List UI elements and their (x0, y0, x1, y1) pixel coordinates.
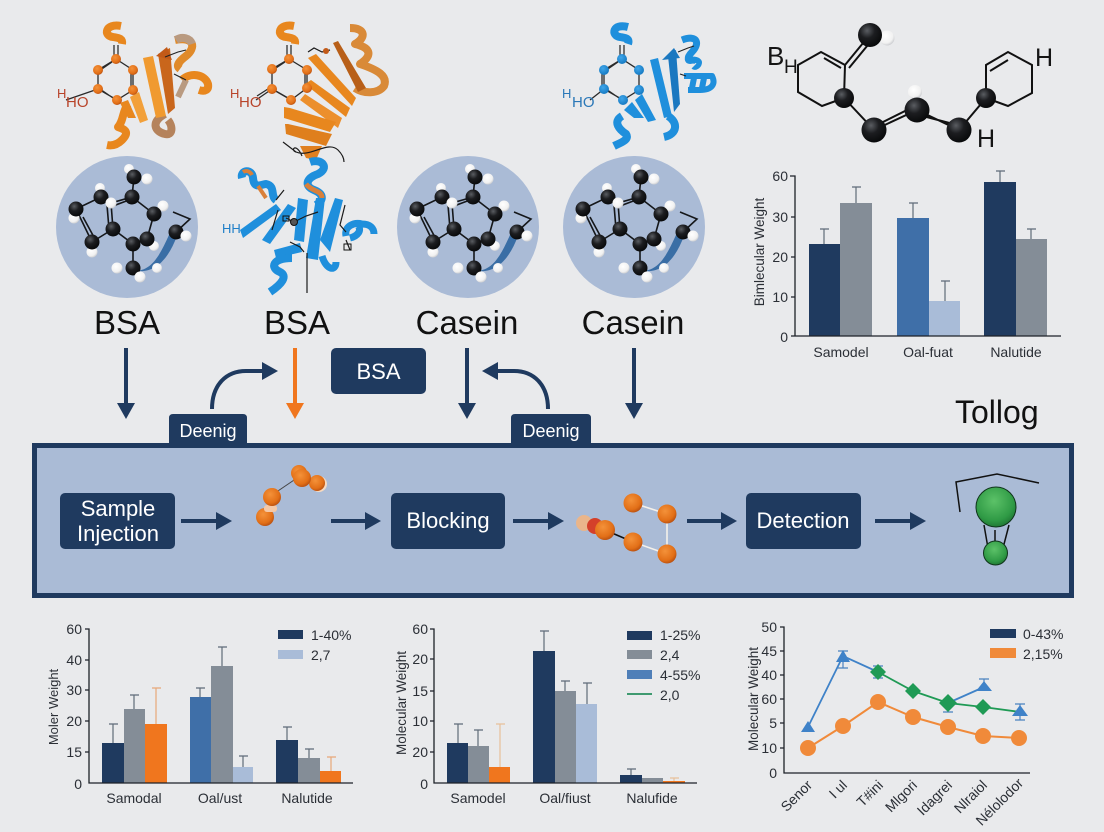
bar chart bottom left: 30 (66, 682, 82, 698)
bar chart top right: Nalutide (990, 344, 1042, 360)
legend: 2,7 (311, 647, 331, 663)
bar chart top right (752, 168, 1061, 360)
box: BSA (331, 348, 426, 394)
bar chart top right: 20 (772, 249, 788, 265)
bar chart bottom centre (394, 621, 700, 806)
bar chart top right: Bimlecular Weight (752, 197, 767, 306)
icon: orange and blue protein ribbon: HO (239, 94, 262, 111)
arrow (875, 512, 926, 530)
arrow: BSA down (117, 348, 135, 419)
arrow (687, 512, 737, 530)
tab: Deenig left: Deenig (179, 421, 237, 441)
arrow (331, 512, 381, 530)
arrow (513, 512, 564, 530)
line chart bottom right: 50 (761, 619, 777, 635)
bar chart bottom centre: Nalufide (626, 790, 678, 806)
icon: orange protein ribbon with ring: H (57, 86, 66, 101)
label: Casein right: Casein (582, 304, 684, 341)
line chart bottom right: Mlgori (882, 777, 920, 815)
bar chart bottom left: Nalutide (281, 790, 333, 806)
line chart bottom right: 60 (761, 691, 777, 707)
line chart bottom right (746, 619, 1063, 829)
icon: orange and blue protein ribbon (222, 26, 385, 293)
icon: skeletal molecule top right: H (977, 125, 995, 153)
line chart bottom right: 5 (769, 715, 777, 731)
bar chart bottom left (46, 621, 353, 806)
bar chart bottom left: 0 (74, 776, 82, 792)
icon: molecule circle 3 (563, 156, 705, 298)
legend (990, 626, 1063, 662)
bar chart bottom left: 20 (66, 713, 82, 729)
icon: molecule circle 1 (56, 156, 198, 298)
legend: 4-55% (660, 667, 700, 683)
bar chart top right: 10 (772, 289, 788, 305)
icon: orange protein ribbon with ring: HO (66, 94, 88, 111)
line chart bottom right: Nélolodor (972, 775, 1026, 829)
icon: skeletal molecule top right (767, 23, 1053, 153)
line chart bottom right: T#ini (853, 777, 886, 810)
legend (278, 627, 351, 663)
bar chart bottom centre: 10 (412, 713, 428, 729)
icon: skeletal molecule top right: H (784, 57, 798, 78)
line chart bottom right: Molecular Weight (746, 647, 761, 751)
step: Detection (746, 493, 861, 549)
step: Blocking: Blocking (406, 508, 490, 533)
icon: orange and blue protein ribbon: H (230, 86, 239, 101)
line chart bottom right: Idagrei (914, 777, 955, 818)
line chart bottom right: I ul (826, 777, 850, 801)
tab: Deenig right: Deenig (522, 421, 580, 441)
line chart bottom right: Senor (777, 777, 815, 815)
bar chart bottom centre: 60 (412, 621, 428, 637)
legend: 1-40% (311, 627, 351, 643)
legend: 1-25% (660, 627, 700, 643)
legend: 2,4 (660, 647, 680, 663)
icon: orange protein ribbon with ring (57, 26, 208, 145)
label: BSA centre: BSA (264, 304, 330, 341)
bar chart bottom centre: 15 (412, 683, 428, 699)
arrow: casein right down (625, 348, 643, 419)
bar chart top right: Samodel (813, 344, 869, 360)
bar chart bottom left: Oal/ust (198, 790, 242, 806)
line chart bottom right: 45 (761, 643, 777, 659)
step: Sample Injection: Sample (81, 496, 155, 521)
icon: green detection spheres (956, 474, 1039, 565)
icon: blue protein ribbon with ring: HO (572, 94, 594, 111)
step: Sample Injection (60, 493, 175, 549)
bar chart bottom centre: 20 (412, 744, 428, 760)
icon: blue protein ribbon with ring: H (562, 86, 571, 101)
label: BSA: BSA (94, 304, 160, 341)
legend (627, 627, 700, 703)
bar chart bottom left: Moler Weight (46, 668, 61, 745)
bar chart bottom centre: Samodel (450, 790, 506, 806)
arrow: curved left (212, 362, 278, 409)
icon: orange chain (576, 494, 676, 564)
bar chart top right: Oal-fuat (903, 344, 953, 360)
icon: orange and blue protein ribbon: HH (222, 221, 241, 236)
box: BSA: BSA (356, 359, 401, 384)
step: Blocking (391, 493, 505, 549)
arrow: casein down (458, 348, 476, 419)
tab: Deenig left (169, 414, 247, 447)
bar chart bottom left: 15 (66, 744, 82, 760)
legend: 0-43% (1023, 626, 1063, 642)
bar chart top right: 0 (780, 329, 788, 345)
legend: 2,0 (660, 687, 680, 703)
icon: orange molecule (256, 465, 327, 526)
line chart bottom right: Nlraiol (951, 777, 990, 816)
bar chart bottom left: 40 (66, 652, 82, 668)
icon: skeletal molecule top right: B (767, 41, 784, 71)
icon: skeletal molecule top right: H (1035, 44, 1053, 72)
arrow: orange down (286, 348, 304, 419)
tab: Deenig right (511, 414, 591, 447)
icon: molecule circle 2 (397, 156, 539, 298)
bar chart bottom centre: Molecular Weight (394, 651, 409, 755)
line chart bottom right: 40 (761, 667, 777, 683)
bar chart bottom centre: Oal/fiust (539, 790, 591, 806)
bar chart bottom left: Samodal (106, 790, 162, 806)
legend: 2,15% (1023, 646, 1063, 662)
bar chart top right: 30 (772, 209, 788, 225)
label: Casein: Casein (416, 304, 518, 341)
arrow (181, 512, 232, 530)
line chart bottom right: 0 (769, 765, 777, 781)
step: Detection: Detection (757, 508, 849, 533)
line chart bottom right: 10 (761, 740, 777, 756)
step: Sample Injection: Injection (77, 521, 159, 546)
panel: workflow (34, 414, 1072, 596)
bar chart bottom centre: 0 (420, 776, 428, 792)
bar chart bottom centre: 20 (412, 651, 428, 667)
arrow: curved right (482, 362, 548, 409)
bar chart bottom left: 60 (66, 621, 82, 637)
title: Tollog: Tollog (955, 394, 1039, 430)
bar chart top right: 60 (772, 168, 788, 184)
icon: blue protein ribbon with ring (562, 26, 714, 146)
